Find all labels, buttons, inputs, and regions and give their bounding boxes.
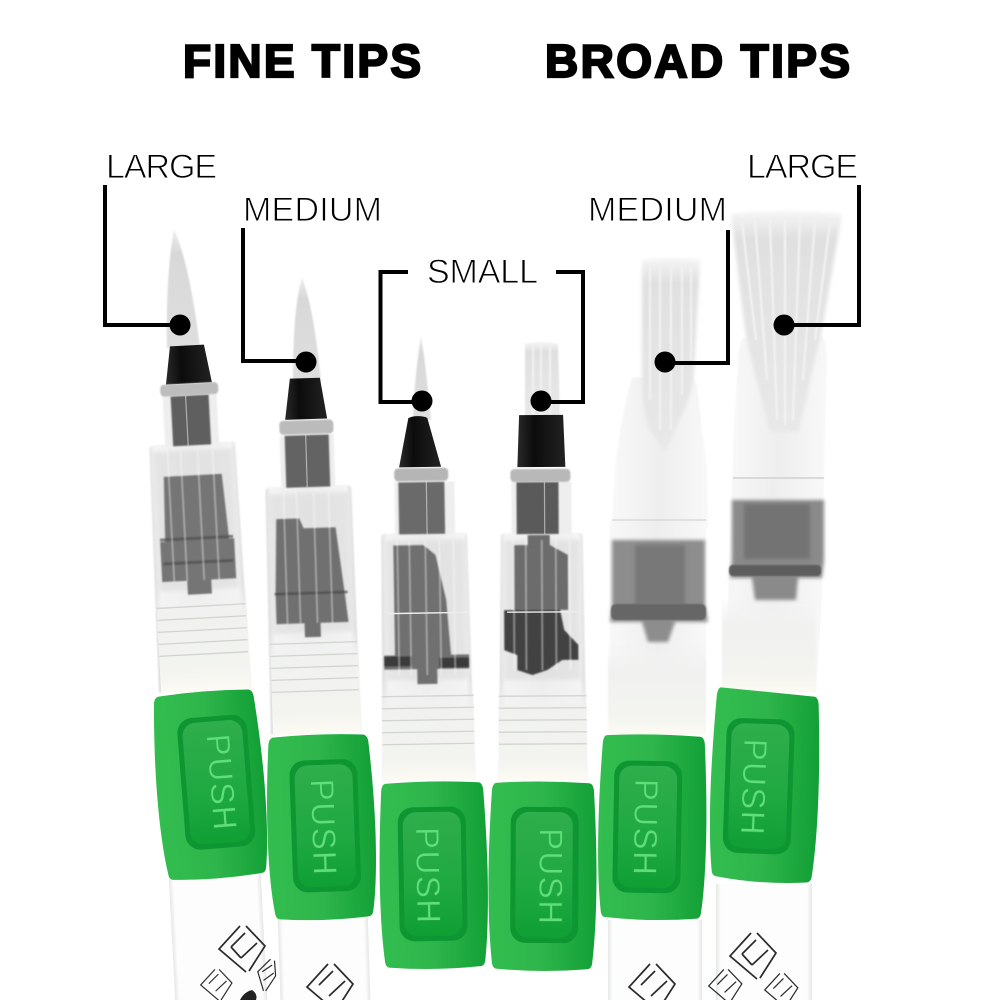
grip: brush 6: PUSH [734, 738, 774, 835]
tube: brush 5 [608, 522, 708, 734]
label: medium: MEDIUM [243, 191, 382, 229]
logo mark fragment [240, 990, 256, 1000]
brush 6: broad large [707, 211, 842, 1000]
clear ferrule: broad large [732, 337, 827, 482]
tube: brush 2 [260, 377, 371, 1000]
logo: brush 1 small left [201, 969, 232, 1000]
label: large: LARGE [747, 148, 858, 186]
grip: brush 4: PUSH [532, 828, 570, 924]
grip: brush 2: PUSH [304, 778, 344, 875]
bristle: broad small [525, 342, 560, 418]
tube: brush 6 [722, 480, 824, 692]
grip: brush 6 [707, 687, 822, 884]
callout: small [380, 253, 583, 412]
logo: brush 6 small left [709, 969, 742, 1000]
logo: brush 6 small right [765, 973, 798, 1000]
callout: fine large [105, 148, 217, 336]
bristle: fine large [167, 230, 200, 348]
heading: broad tips: BROAD TIPS [545, 35, 850, 87]
bristle: fine medium [293, 278, 321, 382]
grip: brush 3: PUSH [409, 827, 447, 923]
label: medium: MEDIUM [588, 191, 727, 229]
clear ferrule: broad medium [612, 377, 708, 528]
bristle: broad large [731, 211, 842, 432]
brush 5: broad medium [597, 258, 708, 1000]
bristle: fine small [413, 336, 431, 420]
grip: brush 1 [149, 687, 272, 883]
lower tube: brush 5 [608, 920, 702, 1000]
bristle: broad medium [642, 258, 700, 452]
label: small: SMALL [427, 253, 538, 291]
logo: brush 5 [629, 964, 675, 1000]
grip: brush 3 [378, 781, 489, 970]
label: large: LARGE [106, 148, 217, 186]
callout: broad large [747, 148, 859, 336]
grip: brush 4 [488, 781, 597, 971]
heading: fine tips: FINE TIPS [183, 35, 421, 87]
logo: brush 2 [307, 964, 353, 1000]
tube: brush 4 [497, 415, 587, 780]
brush 2: fine medium [260, 278, 378, 1000]
logo: brush 6 large [730, 933, 776, 979]
lower tube: brush 6 [716, 884, 812, 1000]
grip: brush 2 [264, 733, 378, 922]
callout: fine medium [243, 191, 382, 372]
callout: broad medium [588, 191, 728, 372]
brush 1: fine large [141, 230, 272, 1000]
tube: brush 1 [141, 343, 268, 1000]
brush 4: broad small [488, 342, 597, 971]
grip: brush 5: PUSH [627, 779, 665, 875]
grip: brush 5 [597, 734, 708, 921]
brush 3: fine small [377, 336, 489, 970]
logo: brush 1 small right [252, 957, 280, 993]
logo: brush 1 large [219, 926, 265, 972]
tube: brush 3 [377, 415, 475, 781]
grip: brush 1: PUSH [200, 733, 244, 831]
